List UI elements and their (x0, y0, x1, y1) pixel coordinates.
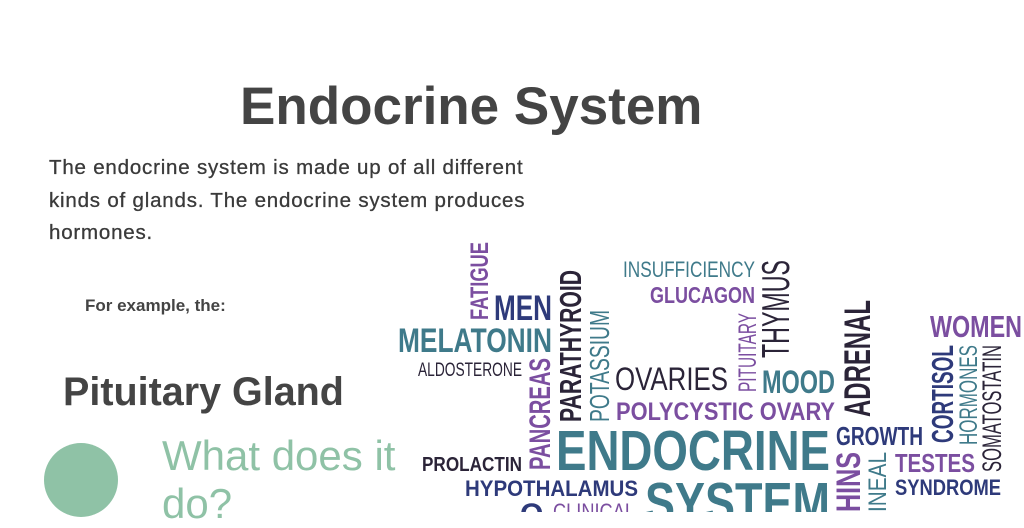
word cloud: SYNDROME (895, 475, 1001, 500)
word cloud: THYMUS (755, 260, 798, 358)
word cloud: CORTISOL (925, 345, 960, 443)
example label: For example, the: (85, 296, 226, 315)
word cloud: INSUFFICIENCY (623, 257, 755, 282)
title: Endocrine System (240, 77, 702, 136)
question text: What does it (162, 432, 395, 479)
intro paragraph: The endocrine system is made up of all different (49, 156, 523, 179)
word cloud: HINS (830, 452, 868, 512)
intro paragraph: hormones. (49, 221, 153, 244)
word cloud: PROLACTIN (422, 454, 522, 476)
icon: green circle (44, 443, 118, 517)
intro paragraph (49, 156, 525, 244)
word cloud: PARATHYROID (553, 270, 588, 422)
word cloud: POTASSIUM (584, 310, 615, 422)
question text: do? (162, 480, 232, 527)
heading: pituitary gland: Pituitary Gland (63, 370, 344, 414)
word cloud: HYPOTHALAMUS (465, 476, 638, 501)
word cloud: POLYCYSTIC OVARY (616, 398, 835, 426)
word cloud: OVARIES (615, 361, 728, 397)
word cloud: MEN (494, 289, 552, 328)
word cloud: HORMONES (955, 345, 983, 445)
word cloud: ALDOSTERONE (418, 360, 522, 381)
word cloud: MOOD (762, 364, 835, 400)
word cloud: ADRENAL (837, 300, 878, 417)
word cloud: PITUITARY (734, 313, 762, 392)
word cloud: FATIGUE (466, 242, 494, 320)
word cloud: ENDOCRINE (556, 419, 830, 483)
word cloud: PANCREAS (524, 358, 557, 470)
question text (162, 432, 396, 527)
intro paragraph: kinds of glands. The endocrine system produces (49, 188, 525, 212)
word cloud: GROWTH (836, 421, 923, 451)
word cloud: GLUCAGON (650, 282, 755, 308)
word cloud: SOMATOSTATIN (977, 345, 1007, 472)
word cloud: MELATONIN (398, 322, 552, 360)
word cloud: TESTES (895, 448, 975, 478)
word cloud: INEAL (864, 452, 892, 512)
